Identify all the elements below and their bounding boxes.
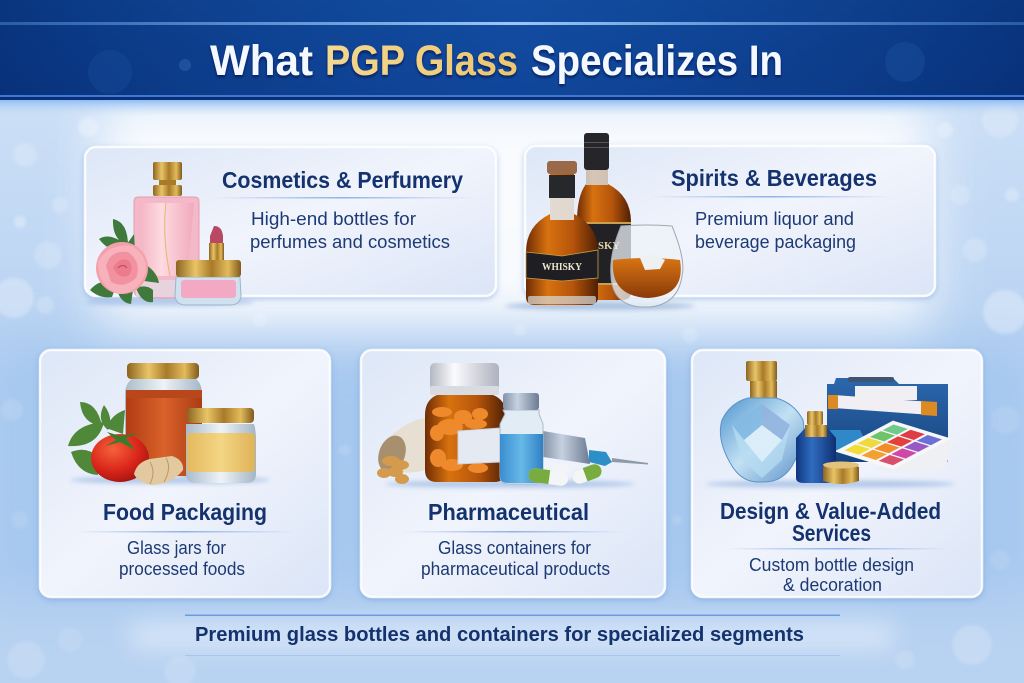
footer tagline: Premium glass bottles and containers for specialized segments (195, 624, 804, 646)
description: spirits: Premium liquor and (695, 209, 854, 229)
panel: pharmaceutical (361, 350, 665, 597)
description: pharmaceutical (421, 538, 610, 579)
description: food: Glass jars for (127, 538, 226, 558)
description: design (749, 555, 914, 595)
icon: food jars, tomato, basil (68, 363, 270, 485)
description: food (119, 538, 245, 579)
heading: design & value-added services: Services (792, 520, 871, 546)
description: pharmaceutical: Glass containers for (438, 538, 591, 558)
title (210, 37, 783, 85)
title: Specializes In (531, 37, 783, 85)
description: spirits: beverage packaging (695, 232, 856, 252)
description: pharmaceutical: pharmaceutical products (421, 559, 610, 579)
panel: design & value-added services (692, 350, 982, 597)
panel: spirits & beverages (505, 133, 935, 310)
header banner (0, 0, 1024, 116)
icon: medicine bottle, vial, syringe, pills (373, 363, 648, 488)
heading: pharmaceutical: Pharmaceutical (428, 499, 589, 525)
description: food: processed foods (119, 559, 245, 579)
description: cosmetics: High-end bottles for (251, 209, 416, 229)
icon: whisky bottles and glass (505, 133, 695, 310)
panel: food packaging (40, 350, 330, 597)
title: PGP Glass (325, 37, 518, 85)
icon: perfume, rose and cosmetics jar (85, 162, 255, 306)
description: design: Custom bottle design (749, 555, 914, 575)
footer tagline (130, 614, 894, 656)
description: cosmetics: perfumes and cosmetics (250, 232, 450, 252)
icon: crystal perfume, bottle, printing press, color swatches (705, 361, 955, 488)
icon: whisky bottles and glass: WHISKY (542, 261, 582, 273)
description: design: & decoration (783, 575, 882, 595)
heading: food packaging: Food Packaging (103, 499, 267, 525)
heading: design & value-added services: Design & Value-Added (720, 498, 941, 524)
panel: cosmetics & perfumery (85, 147, 496, 306)
heading: cosmetics & perfumery: Cosmetics & Perfumery (222, 167, 463, 193)
heading: design & value-added services (720, 498, 941, 546)
icon: whisky bottles and glass: SKY (598, 240, 620, 252)
description: spirits (695, 209, 856, 252)
title: What (210, 37, 313, 85)
heading: spirits & beverages: Spirits & Beverages (671, 165, 877, 191)
description: cosmetics (250, 209, 450, 252)
